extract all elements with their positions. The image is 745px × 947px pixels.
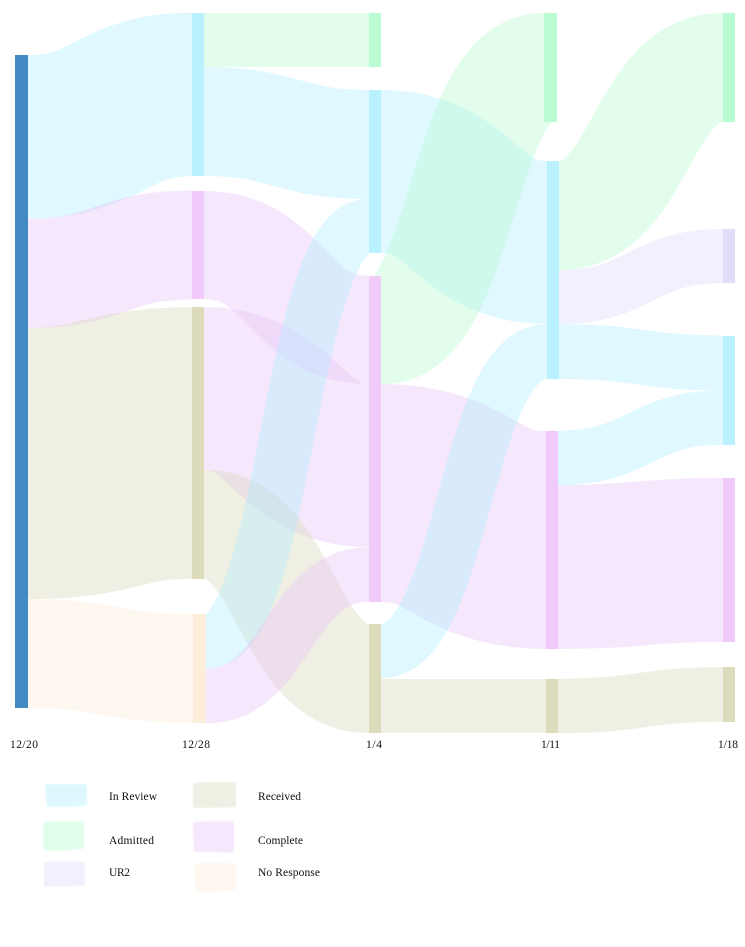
node: In Review <box>369 90 381 253</box>
link: In Review to In Review <box>381 172 547 242</box>
node: UR2 <box>723 229 735 283</box>
label: 1/18: 1/18 <box>718 739 738 751</box>
legend label: Admitted: Admitted <box>109 835 154 847</box>
link: Complete to Complete <box>558 560 723 567</box>
node: No Response <box>193 614 206 723</box>
legend label: Received: Received <box>258 791 301 803</box>
link: No Response to Complete <box>206 574 369 696</box>
link: Complete to In Review <box>558 418 723 458</box>
link: Received to In Review <box>381 352 547 651</box>
node: Complete <box>723 478 735 642</box>
nodes: 1/18 column <box>723 13 735 722</box>
nodes: 12/20 column <box>15 55 28 708</box>
label: 12/20: 12/20 <box>10 739 38 751</box>
legend <box>45 784 320 890</box>
link: In Review to Admitted <box>204 13 369 67</box>
node: In Review <box>192 13 204 176</box>
link: In Review to In Review <box>559 352 723 363</box>
link: In Review to UR2 <box>559 256 723 297</box>
nodes: 1/11 column <box>544 13 559 733</box>
link: In Review to In Review <box>204 122 369 144</box>
node: In Review <box>547 161 559 379</box>
node: Admitted <box>544 13 557 122</box>
link: 12/20 to Received <box>28 443 192 464</box>
sankey links: 1/11 to 1/18 <box>558 68 723 706</box>
link: 12/20 to No Response <box>28 654 193 668</box>
link: Complete to Admitted <box>381 68 544 330</box>
link: Received to Received <box>558 694 723 706</box>
link: 12/20 to Complete <box>28 245 192 274</box>
link: Received to Received <box>204 524 369 678</box>
date axis labels <box>10 739 738 751</box>
legend swatch: No Response <box>196 864 234 890</box>
node: Received <box>192 307 204 579</box>
legend label: Complete: Complete <box>258 835 303 847</box>
label: 1/4: 1/4 <box>366 739 382 751</box>
link: Received to Complete <box>204 388 369 466</box>
legend swatch: Admitted <box>45 823 82 848</box>
label: 1/11: 1/11 <box>541 739 560 751</box>
link: Received to Received <box>381 679 546 733</box>
legend swatch: Received <box>195 784 234 806</box>
link: Complete to Complete <box>381 493 546 540</box>
node: Received <box>546 679 558 733</box>
legend label: No Response: No Response <box>258 867 320 879</box>
legend swatch: UR2 <box>46 864 83 885</box>
nodes: 12/28 column <box>192 13 206 723</box>
link: Complete to Complete <box>204 245 369 330</box>
nodes: 1/4 column <box>369 13 381 733</box>
link: No Response to In Review <box>206 226 369 642</box>
sankey links: 1/4 to 1/11 <box>381 68 547 706</box>
node: Complete <box>369 276 381 602</box>
node: Received <box>369 624 381 733</box>
node: Complete <box>192 191 204 299</box>
legend swatch: In Review <box>47 786 85 805</box>
label: 12/28: 12/28 <box>182 739 210 751</box>
legend swatch: Complete <box>195 823 232 851</box>
node: In Review <box>723 336 735 445</box>
legend label: UR2: UR2 <box>109 867 130 879</box>
link: 12/20 to In Review <box>28 94 192 137</box>
legend label: In Review: In Review <box>109 791 158 803</box>
node: Received <box>723 667 735 722</box>
sankey links: 12/28 to 1/4 <box>204 40 369 696</box>
node: Admitted <box>369 13 381 67</box>
sankey links: 12/20 to 12/28 <box>28 94 193 668</box>
node: Admitted <box>723 13 735 122</box>
node: Complete <box>546 431 558 649</box>
link: In Review to Admitted <box>559 68 723 216</box>
